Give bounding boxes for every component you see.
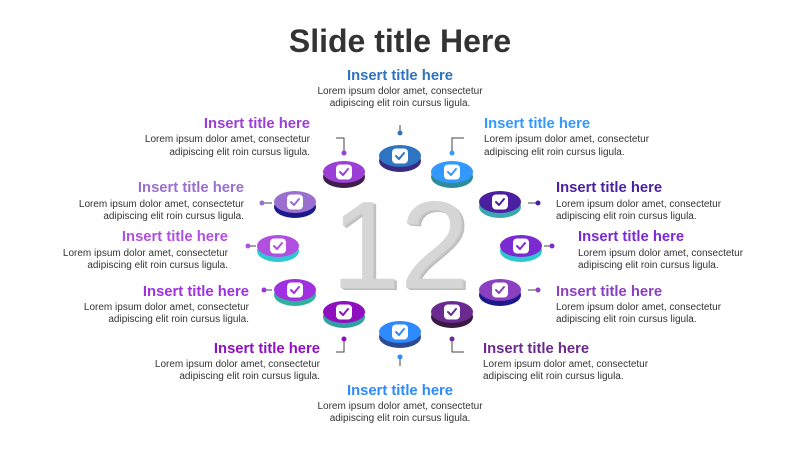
text 11 bottom-right: [483, 341, 649, 382]
text 1 top: [317, 68, 483, 109]
text 5 right upper: [556, 180, 722, 222]
connector lines: [248, 125, 552, 366]
text 6 left mid: Insert title here: [122, 229, 228, 245]
title: Slide title Here: [289, 23, 511, 59]
text 4 left upper: Insert title here: [138, 180, 244, 196]
text 1 top: adipiscing elit roin cursus ligula.: [330, 98, 470, 109]
disc 2 top-left: [323, 150, 365, 188]
disc 12 bottom: [379, 321, 421, 360]
text 7 right mid: [578, 229, 744, 271]
disc 6 left mid: [246, 235, 299, 262]
big number 12: 12: [334, 179, 472, 317]
text 8 left lower: adipiscing elit roin cursus ligula.: [108, 314, 249, 325]
disc 8 left lower: [262, 279, 316, 306]
text 2 top-left: [145, 116, 311, 158]
text 11 bottom-right: adipiscing elit roin cursus ligula.: [483, 371, 624, 382]
text 2 top-left: adipiscing elit roin cursus ligula.: [169, 147, 310, 158]
disc 9 right lower: [479, 279, 540, 306]
big number 12: 12: [333, 178, 470, 316]
text 4 left upper: Lorem ipsum dolor amet, consectetur: [79, 199, 245, 210]
text 6 left mid: Lorem ipsum dolor amet, consectetur: [63, 248, 229, 259]
text 9 right lower: [556, 284, 722, 325]
text 12 bottom: Lorem ipsum dolor amet, consectetur: [317, 401, 483, 412]
text 3 top-right: adipiscing elit roin cursus ligula.: [484, 147, 625, 158]
text 6 left mid: [63, 229, 229, 271]
text 4 left upper: [79, 180, 245, 222]
text 3 top-right: Insert title here: [484, 116, 590, 132]
disc 3 top-right: [431, 150, 473, 188]
text 11 bottom-right: Insert title here: [483, 341, 589, 357]
text 10 bottom-left: Lorem ipsum dolor amet, consectetur: [155, 359, 321, 370]
disc 1 top: [379, 130, 421, 172]
text 5 right upper: Lorem ipsum dolor amet, consectetur: [556, 199, 722, 210]
text 2 top-left: Lorem ipsum dolor amet, consectetur: [145, 134, 311, 145]
disc 11 bottom-right: [431, 301, 473, 342]
disc 4 left upper: [260, 191, 316, 218]
text 8 left lower: [84, 284, 250, 325]
disc 10 bottom-left: [323, 301, 365, 342]
text 9 right lower: adipiscing elit roin cursus ligula.: [556, 314, 697, 325]
text 5 right upper: adipiscing elit roin cursus ligula.: [556, 211, 697, 222]
text 6 left mid: adipiscing elit roin cursus ligula.: [87, 260, 228, 271]
text 2 top-left: Insert title here: [204, 116, 310, 132]
text 10 bottom-left: adipiscing elit roin cursus ligula.: [179, 371, 320, 382]
disc 5 right upper: [479, 191, 540, 218]
text 5 right upper: Insert title here: [556, 180, 662, 196]
text 12 bottom: Insert title here: [347, 383, 453, 399]
text 8 left lower: Lorem ipsum dolor amet, consectetur: [84, 302, 250, 313]
text 1 top: Insert title here: [347, 68, 453, 84]
text 12 bottom: [317, 383, 483, 424]
text 7 right mid: adipiscing elit roin cursus ligula.: [578, 260, 719, 271]
text 3 top-right: Lorem ipsum dolor amet, consectetur: [484, 134, 650, 145]
text 10 bottom-left: Insert title here: [214, 341, 320, 357]
text 12 bottom: adipiscing elit roin cursus ligula.: [330, 413, 470, 424]
text 11 bottom-right: Lorem ipsum dolor amet, consectetur: [483, 359, 649, 370]
text 9 right lower: Insert title here: [556, 284, 662, 300]
text 1 top: Lorem ipsum dolor amet, consectetur: [317, 86, 483, 97]
text 7 right mid: Lorem ipsum dolor amet, consectetur: [578, 248, 744, 259]
text 9 right lower: Lorem ipsum dolor amet, consectetur: [556, 302, 722, 313]
text 10 bottom-left: [155, 341, 321, 382]
text 8 left lower: Insert title here: [143, 284, 249, 300]
big number 12: 12: [331, 177, 469, 315]
text 3 top-right: [484, 116, 650, 158]
text 7 right mid: Insert title here: [578, 229, 684, 245]
text 4 left upper: adipiscing elit roin cursus ligula.: [103, 211, 244, 222]
disc 7 right mid: [500, 235, 554, 262]
